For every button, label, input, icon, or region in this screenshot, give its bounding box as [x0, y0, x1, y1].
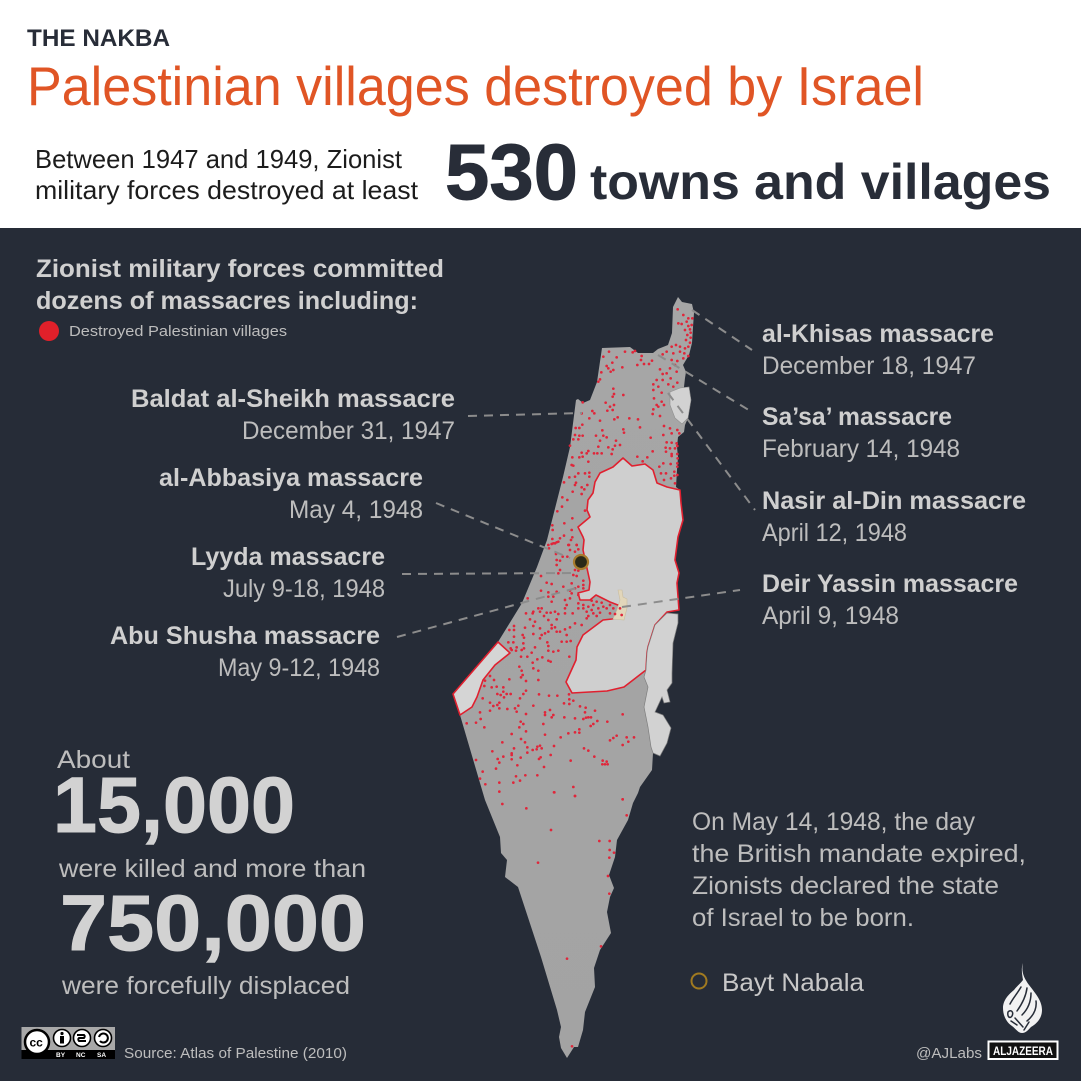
label: Baldat al-Sheikh: Baldat al-Sheikh massacre — [131, 385, 455, 413]
label: Lyyda: July 9-18, 1948 — [223, 575, 385, 603]
label: al-Abbasiya: al-Abbasiya massacre — [159, 464, 423, 492]
map: Jerusalem — [613, 590, 627, 620]
icon: Creative Commons badge: NC — [76, 1052, 86, 1059]
legend — [39, 321, 287, 341]
map: destroyed villages south — [467, 542, 634, 799]
displaced caption: were forcefully displaced — [61, 972, 350, 1000]
map — [453, 297, 694, 1058]
subheading: Zionist military forces committed — [36, 255, 444, 283]
intro text: Between 1947 and 1949, Zionist — [35, 144, 403, 174]
logo wordmark — [988, 1042, 1058, 1059]
label: Sa'sa': Sa’sa’ massacre — [762, 403, 952, 431]
label: Lyyda: Lyyda massacre — [191, 543, 385, 571]
casualty statistics — [53, 746, 366, 1000]
headline number: 530 — [445, 127, 578, 216]
label: al-Khisas: al-Khisas massacre — [762, 320, 994, 348]
icon: Creative Commons badge — [22, 1027, 115, 1059]
intro text — [35, 144, 419, 205]
label: Baldat al-Sheikh — [131, 385, 455, 445]
killed caption: were killed and more than — [58, 855, 366, 883]
text block: declaration: On May 14, 1948, the day — [692, 808, 975, 836]
leader lines — [397, 310, 755, 637]
label: al-Khisas: December 18, 1947 — [762, 352, 976, 380]
map: destroyed villages far south — [502, 792, 627, 1046]
text block: declaration: the British mandate expired, — [692, 840, 1026, 868]
label: Abu Shusha — [110, 622, 380, 682]
label: al-Khisas — [762, 320, 994, 380]
icon: Creative Commons badge: BY — [56, 1052, 66, 1059]
key: Bayt Nabala: Bayt Nabala — [722, 969, 864, 997]
legend label: Destroyed Palestinian villages — [69, 323, 287, 340]
icon: Al Jazeera calligraphy logo — [1003, 963, 1042, 1033]
label: Abu Shusha: Abu Shusha massacre — [110, 622, 380, 650]
label: Nasir al-Din — [762, 487, 1026, 547]
intro text: military forces destroyed at least — [35, 175, 419, 205]
label: al-Abbasiya: May 4, 1948 — [289, 496, 423, 524]
dark panel — [0, 228, 1081, 1081]
subheading: dozens of massacres including: — [36, 287, 418, 315]
map marker: Bayt Nabala — [574, 555, 588, 569]
label: Nasir al-Din: April 12, 1948 — [762, 519, 907, 547]
label: Deir Yassin — [762, 570, 1018, 630]
source: Source: Atlas of Palestine (2010) — [124, 1045, 347, 1062]
label: Lyyda — [191, 543, 385, 603]
logo wordmark: ALJAZEERA — [993, 1044, 1053, 1058]
about: About — [57, 746, 130, 774]
map: West Bank — [566, 458, 683, 693]
label: al-Abbasiya — [159, 464, 423, 524]
map: Gaza — [453, 642, 510, 715]
label: Deir Yassin: Deir Yassin massacre — [762, 570, 1018, 598]
label: Sa'sa' — [762, 403, 960, 463]
headline label: towns and villages — [590, 154, 1051, 210]
text block: declaration: of Israel to be born. — [692, 904, 914, 932]
stat: displaced: 750,000 — [60, 878, 366, 967]
label: Nasir al-Din: Nasir al-Din massacre — [762, 487, 1026, 515]
text block: declaration: Zionists declared the state — [692, 872, 999, 900]
subheading — [36, 255, 444, 315]
title: Palestinian villages destroyed by Israel — [27, 55, 924, 117]
map: Lake Tiberias — [670, 387, 691, 424]
kicker: THE NAKBA — [27, 25, 170, 52]
text block: declaration — [692, 808, 1026, 932]
label: Sa'sa': February 14, 1948 — [762, 435, 960, 463]
map: territory — [453, 297, 694, 1058]
credit: @AJLabs — [916, 1045, 982, 1062]
icon: Creative Commons badge: cc — [30, 1036, 43, 1050]
header — [27, 25, 1051, 216]
label: Baldat al-Sheikh: December 31, 1947 — [242, 417, 455, 445]
stat: killed: 15,000 — [53, 760, 295, 849]
map: destroyed villages north — [548, 309, 692, 548]
label: Abu Shusha: May 9-12, 1948 — [218, 654, 380, 682]
icon: Creative Commons badge: SA — [97, 1052, 106, 1059]
legend dot — [39, 321, 59, 341]
label: Deir Yassin: April 9, 1948 — [762, 602, 899, 630]
map: Dead Sea and Jordan strip — [644, 613, 678, 756]
